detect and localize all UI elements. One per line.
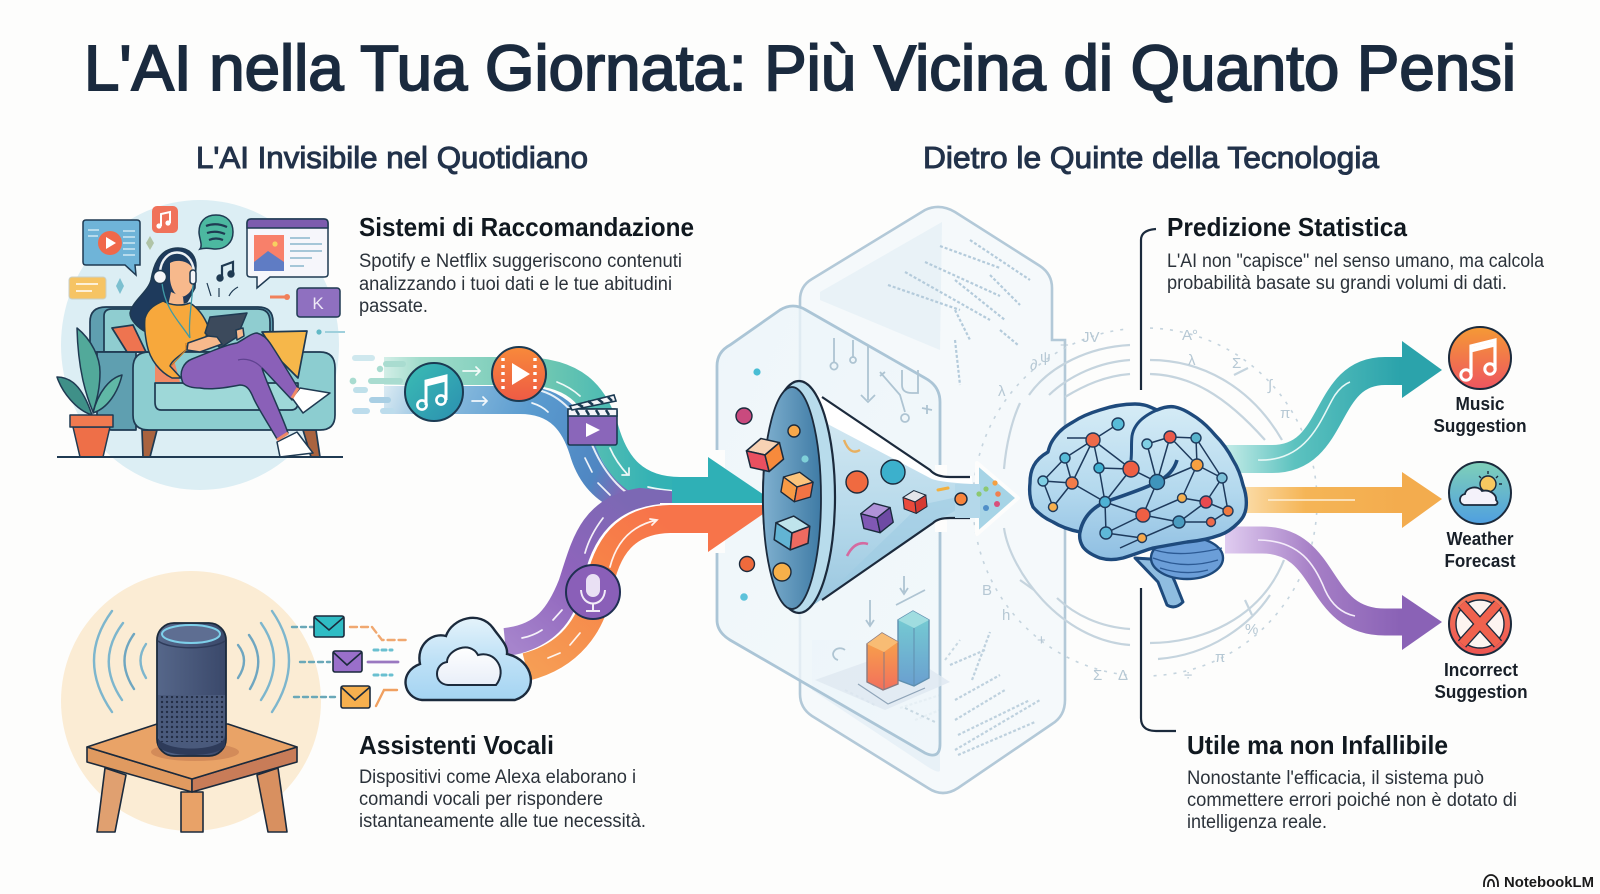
illustration: woman on sofa with media icons (57, 200, 345, 490)
illustration: smart speaker on table (61, 571, 321, 832)
decoration: rings and math symbols around brain: B (982, 582, 992, 599)
halo: white gaps in panel around funnel (706, 450, 947, 553)
data streaks bottom (900, 632, 1040, 755)
label: incorrect suggestion: Suggestion (1434, 682, 1528, 702)
label: incorrect suggestion: Incorrect (1444, 660, 1518, 680)
text block: Utile ma non Infallibile (1187, 730, 1517, 833)
decoration: rings and math symbols around brain: π (1215, 649, 1225, 666)
text block: Utile ma non Infallibile: Utile ma non Infallibile (1187, 730, 1448, 760)
icon: brain with neural network (1030, 404, 1246, 607)
icon: yellow card (69, 277, 106, 299)
text block: Predizione Statistica: L'AI non "capisce" nel senso umano, ma calcola (1167, 251, 1544, 272)
decoration: rings and math symbols around brain: A° (1182, 327, 1198, 344)
heading: right section: Dietro le Quinte della Tecnologia (923, 140, 1380, 175)
text block: Assistenti Vocali: istantaneamente alle tue necessità. (359, 811, 646, 832)
label: weather forecast (1444, 529, 1516, 571)
arrow: funnel output (955, 463, 1018, 534)
flow: voice ribbons (505, 390, 712, 668)
decoration: rings and math symbols around brain: % (1245, 621, 1258, 638)
circuit sketch (830, 338, 932, 660)
sound waves (94, 611, 289, 712)
icon: video play disc (492, 347, 546, 401)
decoration: rings and math symbols around brain: π (1280, 405, 1290, 422)
data lines (845, 640, 960, 722)
flow: recommendation ribbons (350, 358, 712, 506)
arrow: funnel input heads (660, 457, 778, 552)
icon: video card (83, 220, 140, 275)
label: weather forecast: Forecast (1444, 551, 1516, 571)
speed dashes (355, 358, 403, 411)
decoration: rings and math symbols around brain (973, 320, 1317, 685)
text block: Predizione Statistica (1167, 212, 1544, 294)
text block: Assistenti Vocali: Assistenti Vocali (359, 730, 554, 760)
back panel (800, 207, 1065, 793)
icon: streaming speech bubble (199, 215, 233, 249)
title: L'AI nella Tua Giornata: Più Vicina di Quanto Pensi (84, 32, 1516, 104)
text block: Utile ma non Infallibile: commettere errori poiché non è dotato di (1187, 790, 1517, 811)
front panel (717, 306, 940, 755)
table (87, 724, 297, 832)
decoration: rings and math symbols around brain: ψ (1040, 349, 1051, 366)
funnel (736, 368, 1018, 614)
arrow: to music (1225, 341, 1442, 460)
decoration: rings and math symbols around brain: + (1060, 337, 1069, 354)
icon: cloud (406, 618, 531, 700)
decoration: rings and math symbols around brain: Δ (1118, 667, 1128, 684)
decoration: rings and math symbols around brain: ÷ (1184, 667, 1192, 684)
arrow: to incorrect suggestion (1225, 540, 1442, 650)
decoration: rings and math symbols around brain: + (1037, 632, 1046, 649)
icon: purple card: K (312, 294, 324, 313)
network links (1043, 424, 1228, 548)
heading: left section: L'AI Invisibile nel Quotidiano (196, 140, 588, 175)
decoration: rings and math symbols around brain: λ (998, 383, 1006, 400)
text block: Sistemi di Raccomandazione: Sistemi di Raccomandazione (359, 212, 694, 242)
text block: Sistemi di Raccomandazione: analizzando i tuoi dati e le tue abitudini (359, 274, 672, 295)
logo: NotebookLM: NotebookLM (1504, 874, 1594, 891)
icon: music note (217, 262, 234, 281)
icon: sofa (90, 307, 335, 457)
text block: Assistenti Vocali (359, 730, 646, 832)
text block: Assistenti Vocali: Dispositivi come Alexa elaborano i (359, 767, 636, 788)
icon: clapperboard (568, 395, 617, 445)
decoration: rings and math symbols around brain: ∫ (1267, 377, 1274, 394)
decoration: rings and math symbols around brain: Σ (1093, 667, 1102, 684)
brace: bottom-right section (1141, 588, 1176, 731)
text block: Assistenti Vocali: comandi vocali per rispondere (359, 789, 603, 810)
data streaks top (888, 240, 1030, 385)
bar chart (815, 611, 950, 710)
decoration: rings and math symbols around brain: JV (1082, 329, 1100, 346)
network nodes (1038, 418, 1233, 542)
cubes (744, 434, 928, 552)
icon: incorrect suggestion (1449, 593, 1511, 655)
decoration: rings and math symbols around brain: λ (1188, 352, 1196, 369)
label: weather forecast: Weather (1446, 529, 1514, 549)
arrow: to weather (1243, 472, 1442, 528)
funnel body (812, 390, 972, 606)
text block: Sistemi di Raccomandazione: passate. (359, 296, 428, 317)
decoration: rings and math symbols around brain: Σ (1232, 355, 1241, 372)
icon: music disc (405, 363, 463, 421)
label: music suggestion (1434, 394, 1526, 436)
label: incorrect suggestion (1434, 660, 1528, 702)
text block: Sistemi di Raccomandazione (359, 212, 694, 317)
label: music suggestion: Suggestion (1434, 416, 1526, 436)
output sprinkles (938, 480, 1001, 511)
speaker (157, 623, 226, 756)
icon: music tile (152, 206, 178, 233)
decorative connectors (270, 296, 285, 298)
text block: Sistemi di Raccomandazione: Spotify e Netflix suggeriscono contenuti (359, 251, 682, 272)
text block: Predizione Statistica: probabilità basate su grandi volumi di dati. (1167, 273, 1507, 294)
decoration: rings and math symbols around brain: h (1002, 607, 1010, 624)
icon: weather forecast (1449, 462, 1511, 524)
brace: top-right section (1141, 229, 1156, 390)
text block: Predizione Statistica: Predizione Statistica (1167, 212, 1407, 242)
decoration: rings and math symbols around brain: ∂ (1030, 357, 1037, 374)
panel: glass layers behind funnel (717, 207, 1068, 793)
text block: Utile ma non Infallibile: Nonostante l'efficacia, il sistema può (1187, 768, 1484, 789)
icon: woman (130, 248, 330, 457)
funnel rim (762, 380, 836, 614)
icon: plant (57, 328, 122, 457)
loose particles (736, 368, 905, 601)
text block: Utile ma non Infallibile: intelligenza reale. (1187, 812, 1327, 833)
icon: music suggestion (1449, 327, 1511, 389)
label: music suggestion: Music (1456, 394, 1504, 414)
icon: browser window (247, 219, 328, 288)
icon: message envelopes with connectors (292, 616, 408, 708)
icon: purple card (297, 288, 340, 317)
floor line (57, 456, 343, 458)
icon: microphone disc (566, 565, 620, 619)
